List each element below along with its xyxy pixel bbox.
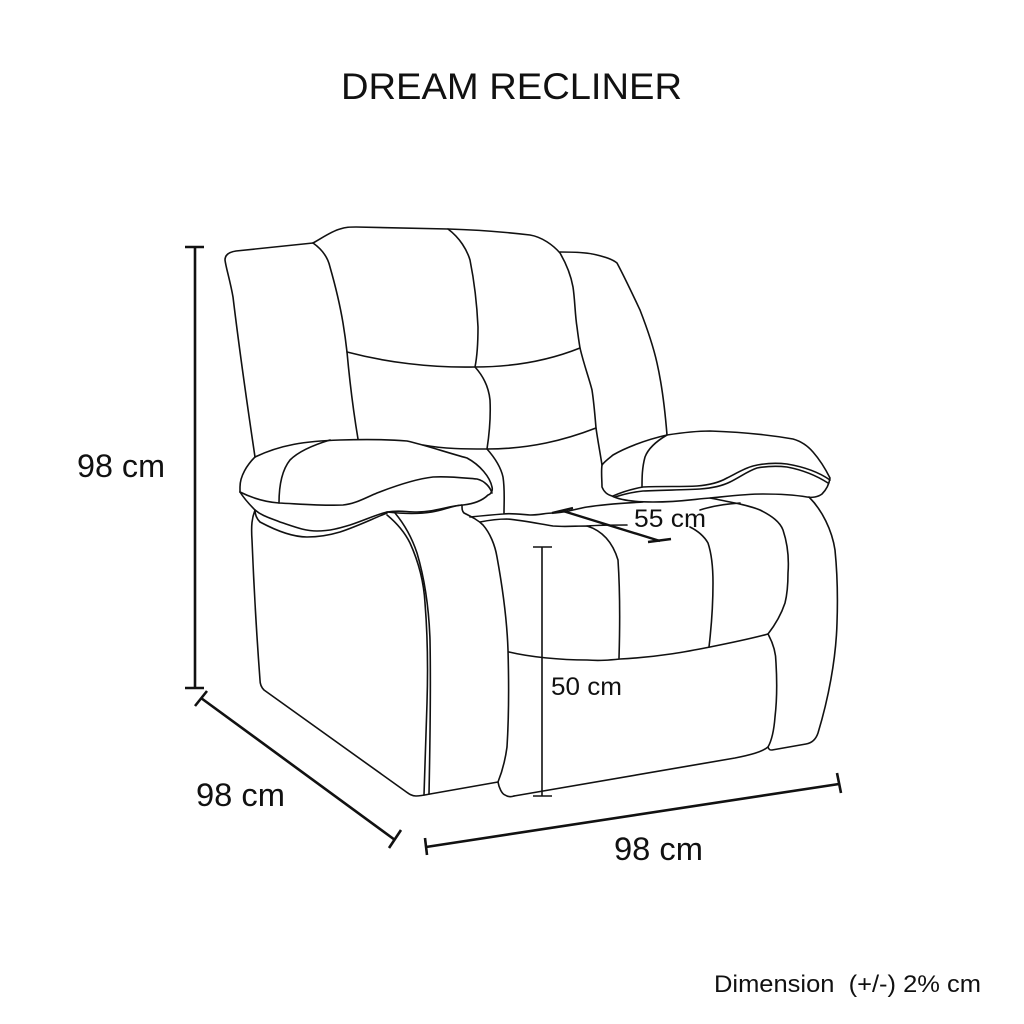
footrest right edge [768, 497, 837, 750]
footnote: dimension tolerance: Dimension (+/-) 2% cm [714, 971, 981, 998]
label: width 98 cm: 98 cm [614, 831, 703, 867]
seat center seam [690, 527, 713, 647]
label: seat height 50 cm: 50 cm [551, 673, 622, 701]
seat front lip, left [480, 519, 620, 658]
left armrest seam [279, 440, 330, 503]
left armrest underside [240, 492, 462, 531]
left wing of backrest [225, 243, 313, 457]
dimension: overall height [185, 247, 204, 688]
title: DREAM RECLINER [341, 66, 682, 107]
left armrest tip [240, 457, 255, 492]
footrest bottom edge [514, 747, 768, 796]
backrest top and right edge [313, 227, 602, 465]
label: seat depth 55 cm: 55 cm [634, 505, 706, 533]
seat stub behind dimension [587, 525, 627, 526]
seat front cross seam [509, 634, 768, 660]
left arm cushion lip [255, 510, 387, 537]
backrest lower cross seam [423, 428, 596, 449]
dimension: overall depth [195, 691, 401, 848]
seat right cushion [700, 503, 740, 510]
label: depth 98 cm: 98 cm [196, 777, 285, 813]
dimension: overall width [425, 773, 841, 855]
label: height 98 cm: 98 cm [77, 448, 165, 484]
left arm outer side [252, 510, 498, 796]
right armrest front trim [613, 463, 830, 496]
left arm double seam [387, 515, 428, 795]
left armrest top [255, 440, 492, 514]
dimension: seat depth [552, 508, 671, 542]
right wing of backrest [560, 252, 667, 435]
backrest left seam [313, 243, 358, 439]
left armrest front edge [240, 477, 492, 505]
backrest upper cross seam [347, 348, 580, 367]
right armrest seam [642, 435, 667, 487]
backrest center seam [448, 229, 504, 513]
left arm front panel [462, 505, 514, 797]
seat back edge [470, 502, 643, 517]
right armrest [602, 431, 830, 502]
recliner line drawing [225, 227, 837, 797]
dimension: seat height [533, 547, 552, 796]
